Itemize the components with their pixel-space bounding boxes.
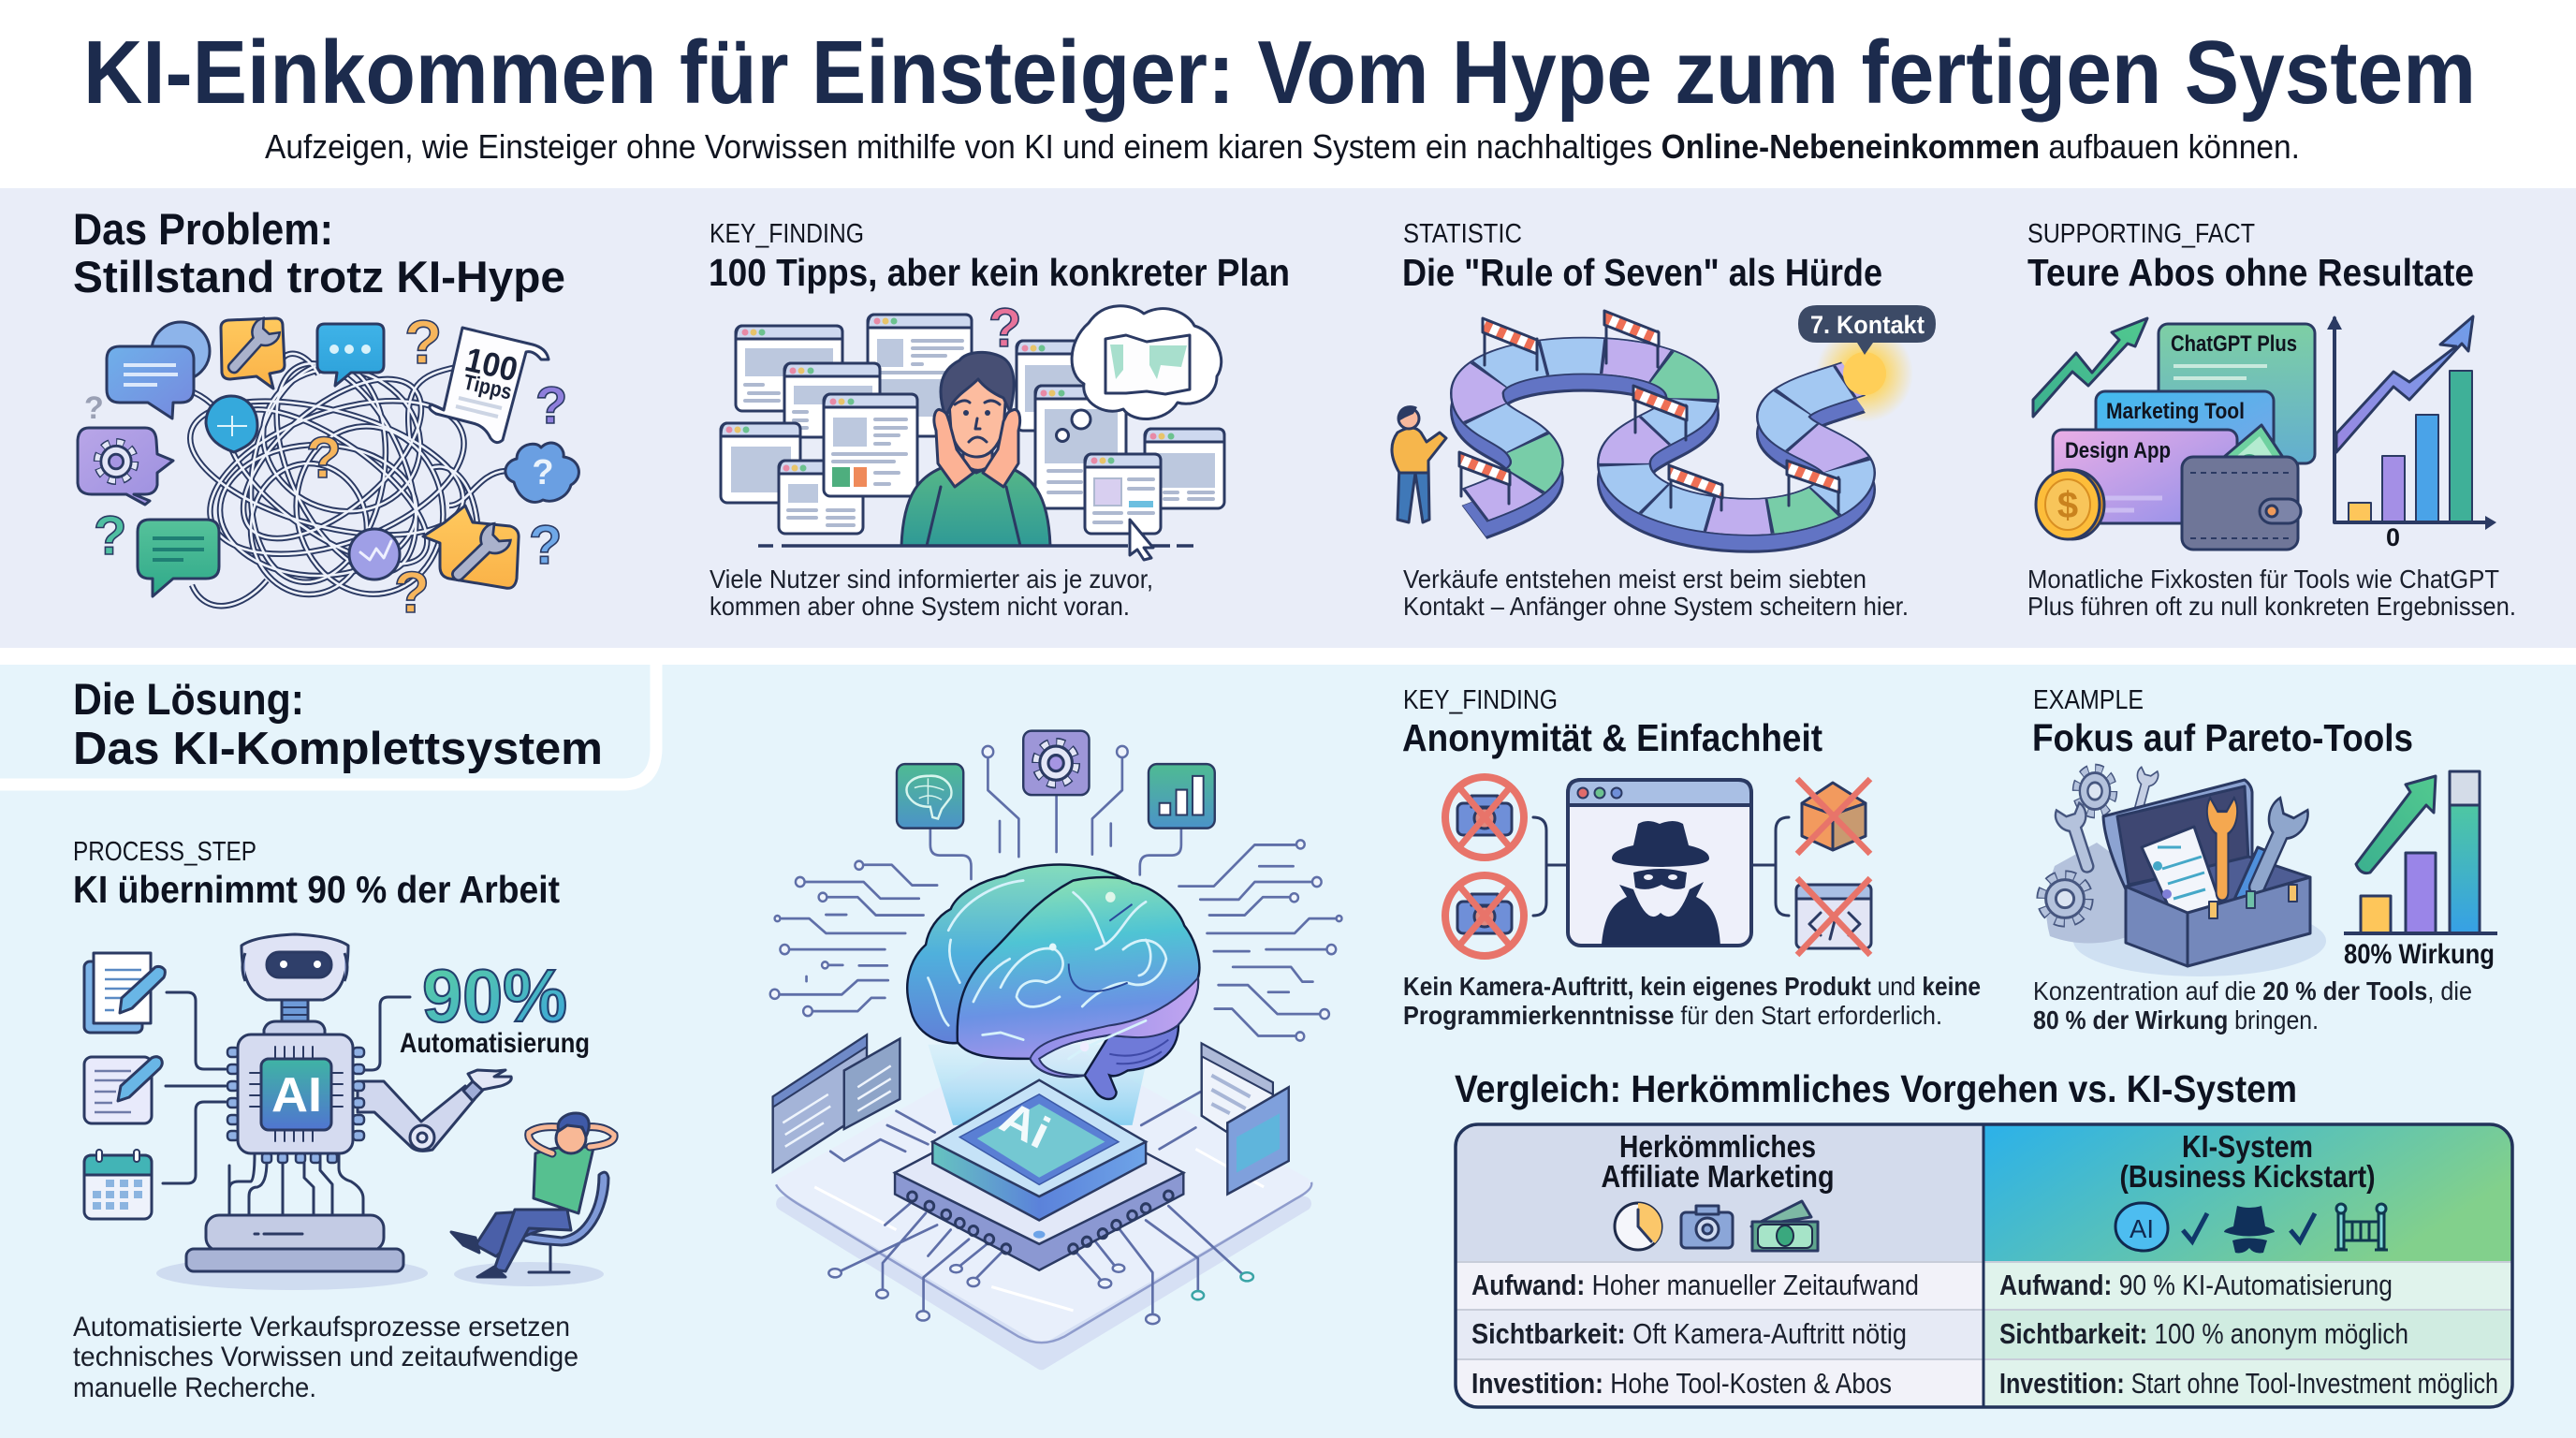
text: Programmierkenntnisse für den Start erforderlich. (1403, 1001, 1942, 1030)
text: Viele Nutzer sind informierter ais je zuvor, (710, 565, 1153, 594)
text: kommen aber ohne System nicht voran. (710, 592, 1130, 621)
lid (2103, 780, 2252, 889)
rows: KI-System: Investition: Start ohne Tool-Investment möglich (1999, 1367, 2498, 1400)
stat: 90% (400, 954, 590, 1059)
illustration: robot and relaxed person (84, 934, 614, 1290)
brain (907, 865, 1199, 1099)
question marks: ? (394, 561, 430, 625)
light beam (928, 1045, 1150, 1125)
rows: Herkömmlich: Investition: Hohe Tool-Kosten & Abos (1471, 1367, 1892, 1400)
sun: goal (1843, 352, 1886, 395)
icon: clock (1615, 1203, 1661, 1250)
heading: Das Problem: Das Problem: (73, 204, 333, 254)
question marks: ? (306, 426, 342, 491)
card: Teure Abos: SUPPORTING_FACT (2027, 219, 2255, 249)
icon: calendar (84, 1150, 152, 1219)
column header: Herkömmliches (1601, 1129, 1835, 1251)
robot (186, 934, 511, 1271)
card: KI übernimmt: KI übernimmt 90 % der Arbeit (73, 868, 560, 911)
icon: AI brain: AI (2130, 1214, 2154, 1243)
relaxed person (451, 1113, 614, 1277)
top icons (897, 731, 1215, 829)
chip: Ai (993, 1091, 1058, 1159)
browser windows (721, 315, 1224, 534)
text (1403, 972, 1981, 1030)
icon: check (2183, 1213, 2207, 1241)
text: Verkäufe entstehen meist erst beim siebten (1403, 565, 1866, 594)
icon: camera (1681, 1206, 1733, 1248)
card: KI übernimmt: PROCESS_STEP (73, 837, 256, 867)
icon: wallet with banknote (2182, 425, 2301, 550)
card: Rule of Seven: STATISTIC (1403, 219, 1522, 249)
heading: Die Lösung: Die Lösung: (73, 674, 304, 724)
text: Kein Kamera-Auftritt, kein eigenes Produkt und keine (1403, 972, 1981, 1001)
rows: Herkömmlich: Aufwand: Hoher manueller Zeitaufwand (1471, 1269, 1919, 1301)
icon: document (84, 953, 165, 1033)
subtitle: Aufzeigen, wie Einsteiger ohne Vorwissen mithilfe von KI und einem kiaren System ein nachhaltiges Online-Nebeneinkommen aufbauen können. (265, 127, 2300, 166)
card: Anonymität: Anonymität & Einfachheit (1402, 716, 1822, 759)
rows: KI-System: Sichtbarkeit: 100 % anonym möglich (1999, 1317, 2408, 1350)
text: Konzentration auf die 20 % der Tools, die (2033, 976, 2472, 1005)
side panels (773, 1034, 1289, 1195)
icon: AI brain (2115, 1203, 2168, 1251)
person (901, 352, 1050, 546)
text (73, 1312, 578, 1403)
icon: spy (2224, 1206, 2275, 1253)
road (1474, 356, 1853, 534)
bar chart: 0 (2386, 523, 2400, 551)
card: ChatGPT Plus (2159, 324, 2315, 463)
rows: KI-System: Aufwand: 90 % KI-Automatisierung (1999, 1269, 2393, 1301)
tools behind (2042, 767, 2159, 944)
card: Anonymität (1402, 685, 1981, 1030)
question marks: ? (535, 375, 567, 434)
icon: no product box (1797, 779, 1870, 854)
robot: AI (271, 1068, 322, 1123)
text: Monatliche Fixkosten für Tools wie ChatGPT (2027, 565, 2499, 594)
text: Kontakt – Anfänger ohne System scheitern hier. (1403, 592, 1909, 621)
comparison (1455, 1067, 2512, 1407)
question marks: ? (94, 506, 126, 566)
text: technisches Vorwissen und zeitaufwendige (73, 1342, 578, 1372)
bar chart (2327, 315, 2496, 551)
question marks (84, 307, 567, 625)
icon: gate (2334, 1204, 2388, 1250)
card: Design App: Design App (2065, 438, 2171, 463)
scroll: 100 Tipps (430, 328, 549, 443)
card: Teure Abos: Teure Abos ohne Resultate (2027, 251, 2474, 294)
header (83, 22, 2476, 166)
illustration: toolbox (2042, 767, 2497, 976)
heading: Die Lösung: Das KI-Komplettsystem (73, 724, 603, 774)
heading: Die Lösung (73, 674, 603, 774)
card: Marketing Tool (2096, 391, 2274, 476)
contents (2142, 797, 2311, 917)
card: Pareto-Tools: EXAMPLE (2033, 685, 2144, 715)
desk line (758, 544, 1193, 548)
icon: check (2291, 1213, 2315, 1241)
panel: solution (0, 665, 2576, 1438)
icon: no camera (1445, 875, 1524, 956)
heading: Vergleich: Herkömmliches Vorgehen vs. KI-System (1455, 1067, 2297, 1110)
icon: coin (2036, 470, 2104, 539)
question marks: ? (84, 390, 104, 426)
question marks: ? (404, 307, 442, 376)
card: 100 Tipps (709, 219, 1290, 621)
platform (776, 1037, 1311, 1363)
chip (895, 1080, 1183, 1270)
table (1456, 1124, 2512, 1407)
heading: Das Problem: Stillstand trotz KI-Hype (73, 252, 565, 301)
icon: no code (1796, 878, 1871, 955)
text: Plus führen oft zu null konkreten Ergebnissen. (2027, 592, 2516, 621)
column header: KI-System: (Business Kickstart) (2119, 1159, 2376, 1194)
text (1403, 565, 1909, 621)
box front (2126, 877, 2310, 966)
icon: form (84, 1057, 162, 1123)
scroll: 100 Tipps: Tipps (461, 370, 514, 404)
card: Marketing Tool: Marketing Tool (2106, 399, 2245, 424)
panel: problem (0, 188, 2576, 648)
callout: 7. Kontakt (1798, 305, 1936, 355)
card: Rule of Seven: Die "Rule of Seven" als Hürde (1402, 251, 1882, 294)
person (1392, 405, 1446, 522)
bar chart (2344, 771, 2497, 970)
text: manuelle Recherche. (73, 1372, 316, 1403)
illustration: anonymous browser (1445, 777, 1871, 956)
text (2033, 976, 2472, 1034)
illustration: winding road with hurdles (1392, 305, 1936, 534)
icon: coin: $ (2057, 485, 2078, 526)
icon: no camera (1445, 777, 1524, 858)
scroll: 100 Tipps: 100 (461, 340, 521, 389)
card: ChatGPT Plus: ChatGPT Plus (2171, 331, 2297, 357)
browser with spy (1568, 780, 1751, 946)
card: 100 Tipps: 100 Tipps, aber kein konkreter Plan (709, 251, 1290, 294)
connectors (1533, 817, 1789, 916)
card: Pareto-Tools: Fokus auf Pareto-Tools (2032, 716, 2413, 759)
card: Pareto-Tools (2032, 685, 2497, 1034)
illustration: tangled tools and questions: ? (532, 453, 554, 492)
text (2027, 565, 2516, 621)
central illustration: brain on AI chip (770, 731, 1341, 1363)
card: KI übernimmt (73, 837, 614, 1403)
column header: KI-System (2115, 1129, 2388, 1253)
card: Rule of Seven (1392, 219, 1936, 621)
card: Teure Abos (2027, 219, 2516, 621)
rows: Herkömmlich (1471, 1269, 1919, 1400)
thought cloud with map (1056, 306, 1222, 442)
icon: money (1751, 1201, 1818, 1251)
heading: Das Problem (73, 204, 565, 301)
arrow: green (2033, 318, 2147, 417)
circuit lines (779, 757, 1336, 1315)
column header: KI-System: KI-System (2182, 1129, 2313, 1164)
stat: 90%: 90% (422, 954, 567, 1037)
hurdles (1459, 311, 1839, 512)
card: Anonymität: KEY_FINDING (1403, 685, 1558, 715)
text (710, 565, 1153, 621)
bar chart: 80% Wirkung (2344, 939, 2495, 970)
rows: KI-System (1999, 1269, 2498, 1400)
callout: 7. Kontakt: 7. Kontakt (1810, 311, 1925, 339)
question marks: ? (529, 515, 562, 576)
box opening (2126, 857, 2310, 913)
illustration: tangled tools and questions (78, 307, 578, 625)
column header: Herkömmliches: Affiliate Marketing (1601, 1159, 1835, 1194)
column header: Herkömmliches: Herkömmliches (1619, 1129, 1816, 1164)
illustration: person overwhelmed by browser windows (721, 298, 1224, 560)
rows: Herkömmlich: Sichtbarkeit: Oft Kamera-Auftritt nötig (1471, 1317, 1907, 1350)
text: 80 % der Wirkung bringen. (2033, 1005, 2319, 1034)
stat: 90%: Automatisierung (400, 1028, 590, 1059)
connectors (163, 992, 410, 1183)
illustration: subscriptions and wallet (2033, 315, 2496, 551)
card: Design App (2053, 430, 2237, 523)
question mark: ? (988, 298, 1021, 359)
text: Automatisierte Verkaufsprozesse ersetzen (73, 1312, 570, 1343)
card: 100 Tipps: KEY_FINDING (710, 219, 864, 249)
cursor (1130, 520, 1153, 560)
